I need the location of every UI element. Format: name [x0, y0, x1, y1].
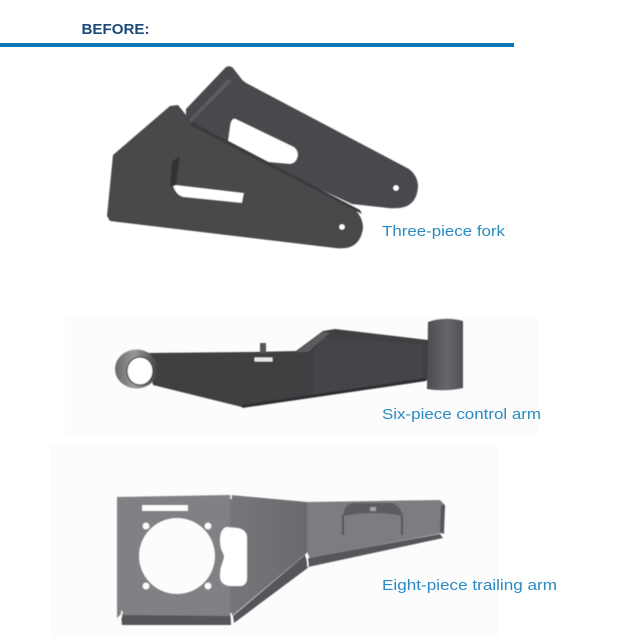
fold highlight [189, 79, 232, 122]
right panel [307, 500, 445, 558]
image: eight-piece trailing arm [117, 494, 445, 625]
middle panel [230, 495, 307, 616]
label: six-piece control arm: Six-piece control arm [382, 406, 541, 423]
bottom flange [242, 378, 426, 408]
corner dark edge [440, 505, 445, 534]
left panel [117, 495, 230, 618]
image backdrop: trailing arm [50, 443, 498, 638]
bolt holes [393, 185, 399, 191]
image backdrop: control arm [65, 318, 538, 435]
front plate [107, 105, 363, 248]
back plate [186, 66, 418, 208]
arm body [147, 329, 428, 407]
peg [260, 343, 266, 353]
bottom flanges [121, 615, 231, 625]
slot [254, 357, 273, 362]
slot inner shading [170, 157, 180, 186]
image: six-piece control arm [115, 319, 463, 408]
image: three-piece fork [107, 66, 418, 248]
bend gaps [121, 494, 308, 622]
end ring [115, 350, 158, 388]
top flange [296, 332, 330, 352]
heading rule [0, 43, 514, 47]
kidney cut-out [220, 527, 247, 586]
arm right face [313, 338, 423, 395]
heading: BEFORE: BEFORE: [82, 22, 150, 38]
label: three-piece fork: Three-piece fork [382, 223, 506, 240]
label: eight-piece trailing arm: Eight-piece trailing arm [382, 577, 557, 594]
bracket [343, 503, 403, 516]
cylinder [427, 319, 463, 390]
